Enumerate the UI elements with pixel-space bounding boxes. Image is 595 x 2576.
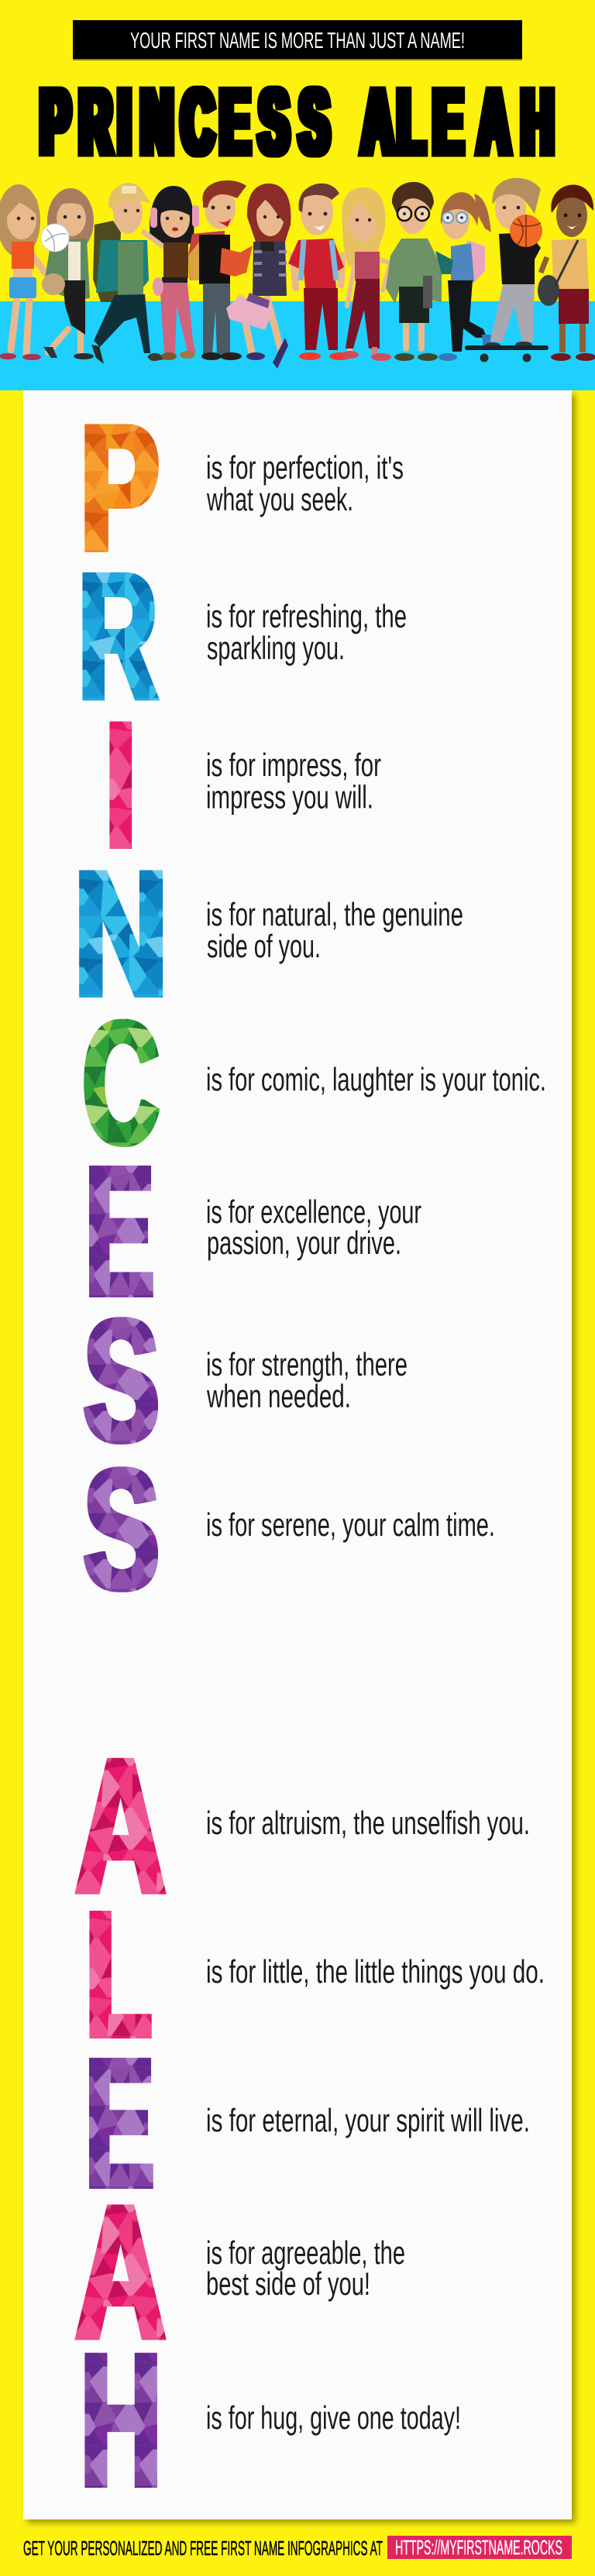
letter A: A xyxy=(76,1720,166,1933)
text R: is for refreshing, the xyxy=(206,598,407,634)
panel: letters and meanings xyxy=(23,387,572,2526)
row A second xyxy=(76,2166,405,2378)
text E: passion, your drive. xyxy=(207,1224,401,1261)
text S: is for strength, there xyxy=(206,1346,408,1382)
letter C: C xyxy=(82,985,160,1180)
letter S second: S xyxy=(84,1434,160,1625)
letter I: I xyxy=(105,685,136,884)
text A second xyxy=(206,2234,405,2302)
text S: when needed. xyxy=(206,1378,351,1414)
text N: is for natural, the genuine xyxy=(206,896,463,933)
person 10 with ponytail xyxy=(435,192,491,361)
person 2 with volleyball xyxy=(41,188,94,359)
illustration: group of students xyxy=(0,178,595,369)
letter E: E xyxy=(84,1129,155,1335)
title: PRINCESS ALEAH xyxy=(40,70,553,173)
person 5 with book xyxy=(188,180,253,360)
text P xyxy=(206,449,404,517)
person 7 with red shirt xyxy=(288,184,351,360)
letter H: H xyxy=(81,2314,162,2526)
letter E second: E xyxy=(84,2020,155,2225)
person 11 on skateboard with basketball xyxy=(465,178,549,362)
row A xyxy=(76,1720,530,1933)
row L xyxy=(85,1874,545,2075)
text I: is for impress, for xyxy=(206,747,381,783)
text R: sparkling you. xyxy=(207,630,345,666)
text H: is for hug, give one today! xyxy=(206,2399,461,2436)
row E xyxy=(84,1129,421,1335)
row R xyxy=(78,536,407,737)
row I xyxy=(105,685,381,884)
floor band xyxy=(0,301,595,390)
letter R: R xyxy=(78,536,158,737)
text P: is for perfection, it's xyxy=(206,449,404,486)
header banner xyxy=(73,20,522,60)
row N xyxy=(74,833,463,1033)
text A second: is for agreeable, the xyxy=(206,2234,405,2271)
row E second xyxy=(84,2020,530,2225)
person 3 with cap and backpack xyxy=(91,183,164,364)
person 6 with pink bag xyxy=(226,184,291,369)
text E: is for excellence, your xyxy=(206,1194,421,1230)
text R xyxy=(206,598,407,666)
row C xyxy=(82,985,546,1180)
text P: what you seek. xyxy=(206,481,353,517)
footer xyxy=(23,2536,572,2560)
text N xyxy=(206,896,463,964)
letter L: L xyxy=(85,1874,152,2075)
person 1 xyxy=(0,184,45,360)
row H xyxy=(81,2314,461,2526)
row P xyxy=(80,387,404,588)
letter S: S xyxy=(84,1285,160,1478)
letter N: N xyxy=(74,833,168,1033)
text I xyxy=(206,747,381,815)
text N: side of you. xyxy=(207,928,321,964)
letter P: P xyxy=(80,387,160,588)
person 4 with headphones xyxy=(144,186,199,361)
person 12 with bag xyxy=(538,184,595,361)
letter A second: A xyxy=(76,2166,166,2378)
row S xyxy=(84,1285,408,1478)
text S xyxy=(206,1346,408,1414)
text E xyxy=(206,1194,421,1261)
person 8 blonde girl xyxy=(342,187,391,361)
text I: impress you will. xyxy=(206,779,373,815)
text A second: best side of you! xyxy=(206,2265,370,2302)
person 9 with glasses xyxy=(386,182,442,361)
row S second xyxy=(84,1434,495,1625)
